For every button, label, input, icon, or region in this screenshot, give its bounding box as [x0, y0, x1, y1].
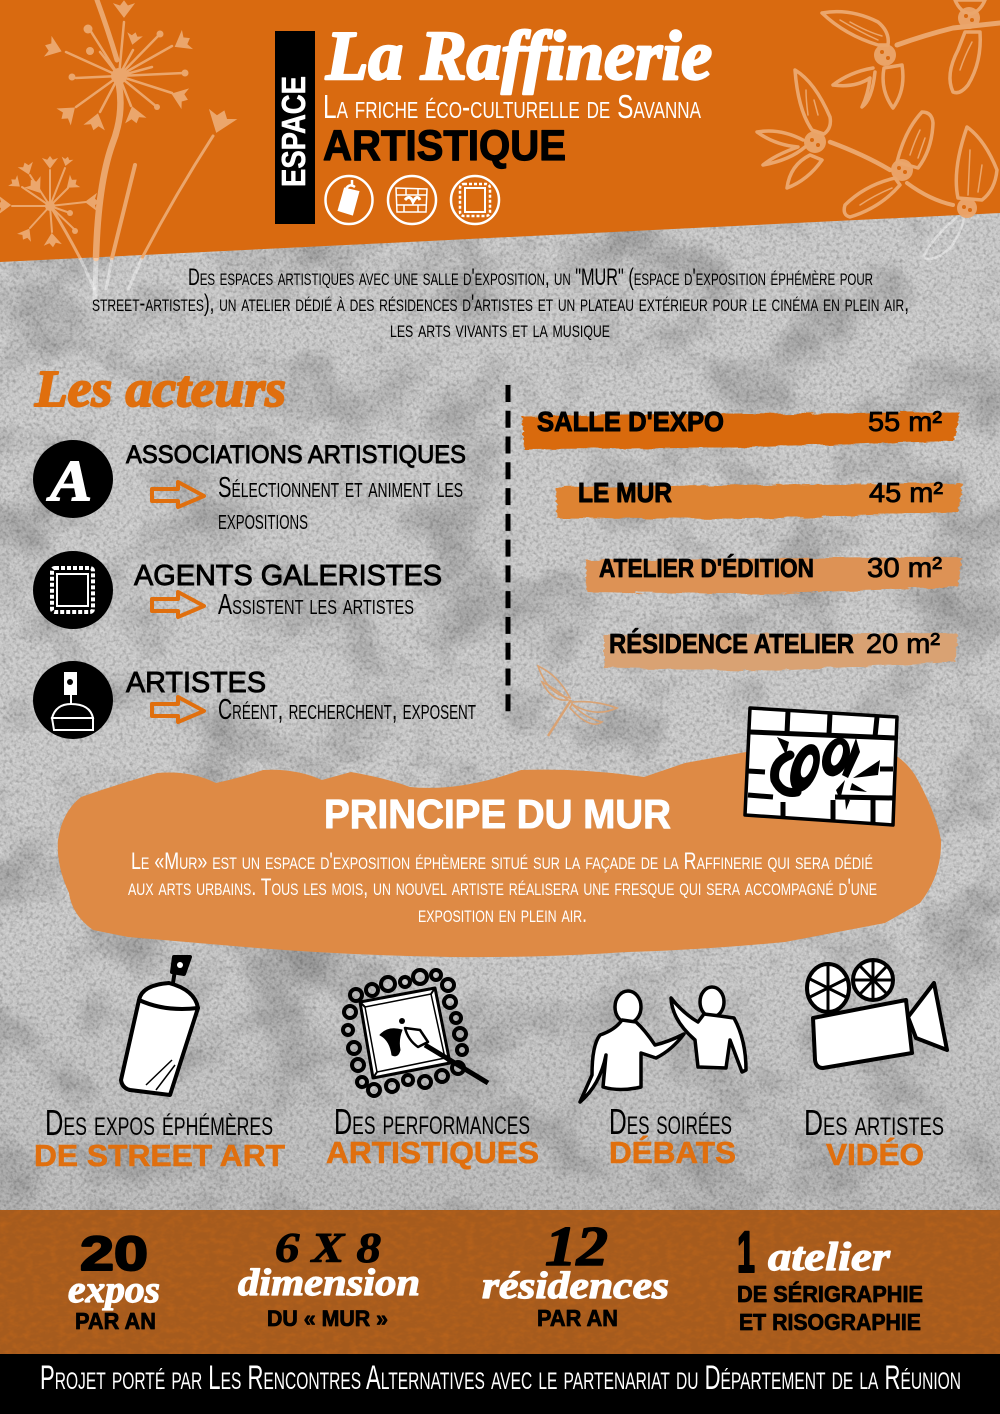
- vertical label: ESPACE: ESPACE: [275, 76, 312, 187]
- icon: wall: [388, 176, 436, 224]
- icon: two people talking: [580, 987, 746, 1102]
- label: video: VIDÉO: [826, 1137, 924, 1172]
- bar: résidence atelier: 20 m²: [866, 628, 940, 659]
- illustration: blossoms right: [757, 0, 1000, 218]
- subtitle: La friche éco-culturelle de Savanna: [323, 88, 701, 125]
- label: performances: [326, 1101, 539, 1170]
- label: street art: [34, 1102, 285, 1173]
- bar: atelier d'édition: [586, 552, 962, 594]
- title: La Raffinerie: [325, 18, 712, 95]
- bar: le mur: [556, 477, 963, 519]
- icon: frame badge: [33, 551, 113, 629]
- actor: agents galeristes: AGENTS GALERISTES: [134, 560, 442, 592]
- label: video: Des artistes: [804, 1102, 944, 1143]
- actor: agents galeristes: [134, 560, 442, 621]
- label: performances: Des performances: [334, 1101, 530, 1142]
- stat: 1 atelier: atelier: [768, 1234, 890, 1279]
- stat: 1 atelier: ET RISOGRAPHIE: [739, 1309, 921, 1335]
- footer: [0, 1354, 1000, 1414]
- bar: le mur: 45 m²: [869, 477, 943, 508]
- body text: exposition en plein air.: [418, 901, 587, 928]
- actor: agents galeristes: Assistent les artistes: [218, 589, 414, 621]
- icon: painted frame: [343, 970, 488, 1096]
- icon: letter A badge: A: [47, 448, 92, 513]
- actor: associations: expositions: [218, 504, 308, 536]
- stat: 12 residences: PAR AN: [537, 1305, 618, 1331]
- heading: les acteurs: Les acteurs: [34, 361, 286, 418]
- actor: artistes: [126, 667, 476, 726]
- intro text: les arts vivants et la musique: [390, 316, 610, 343]
- actor: artistes: ARTISTES: [126, 667, 266, 699]
- label: street art: Des expos éphémères: [45, 1102, 273, 1143]
- header icons: [326, 176, 499, 224]
- actor: associations: [126, 441, 466, 536]
- stat: 1 atelier: [737, 1220, 923, 1335]
- actor: associations: ASSOCIATIONS ARTISTIQUES: [126, 441, 466, 469]
- header band: [0, 0, 1000, 262]
- arrow: [152, 592, 204, 617]
- bar: salle d'expo: [522, 406, 960, 449]
- stat: 6 x 8 dimension: dimension: [238, 1262, 420, 1304]
- stat: 20 expos: expos: [68, 1269, 160, 1311]
- stat: 20 expos: 20: [80, 1228, 148, 1281]
- icon: spray badge: [33, 661, 113, 739]
- illustration: dandelions left: [0, 0, 232, 258]
- heading: PRINCIPE DU MUR: [324, 791, 671, 837]
- panel: principe du mur: [58, 752, 941, 957]
- illustration: faded stems over concrete: [80, 217, 964, 300]
- heading: artistique: ARTISTIQUE: [323, 122, 566, 170]
- icon: frame: [451, 176, 499, 224]
- bar: salle d'expo: 55 m²: [868, 406, 942, 437]
- bar: salle d'expo: SALLE D'EXPO: [537, 406, 724, 437]
- intro text: [92, 264, 909, 343]
- icon: film camera: [807, 960, 947, 1068]
- label: performances: ARTISTIQUES: [326, 1135, 539, 1170]
- body text: [128, 848, 877, 928]
- icon: spray can large: [121, 957, 198, 1095]
- icon: letter A badge: [33, 440, 113, 518]
- arrow: [152, 697, 204, 722]
- label: debats: DÉBATS: [609, 1135, 736, 1170]
- stat: 6 x 8 dimension: [238, 1226, 420, 1331]
- bar: atelier d'édition: 30 m²: [867, 552, 942, 583]
- stat: 20 expos: [68, 1228, 160, 1334]
- stat: 1 atelier: DE SÉRIGRAPHIE: [737, 1280, 923, 1307]
- stat: 12 residences: [482, 1216, 669, 1331]
- stat: 12 residences: 12: [545, 1216, 608, 1278]
- stat: 20 expos: PAR AN: [75, 1308, 156, 1334]
- stats band: [0, 1210, 1000, 1354]
- label: video: [804, 1102, 944, 1172]
- arrow: [152, 482, 204, 507]
- actor: associations: Sélectionnent et animent les: [218, 472, 463, 504]
- actor: artistes: Créent, recherchent, exposent: [218, 694, 476, 726]
- bar: atelier d'édition: ATELIER D'ÉDITION: [599, 553, 814, 583]
- vertical label: ESPACE: [275, 31, 315, 224]
- bar: le mur: LE MUR: [578, 477, 672, 508]
- stat: 6 x 8 dimension: DU « MUR »: [267, 1306, 388, 1331]
- label: street art: DE STREET ART: [34, 1138, 285, 1173]
- bar: résidence atelier: RÉSIDENCE ATELIER: [609, 628, 854, 659]
- stat: 1 atelier: 1: [737, 1220, 755, 1285]
- icon: spray can: [326, 176, 372, 224]
- stat: 12 residences: résidences: [482, 1265, 669, 1307]
- stat: 6 x 8 dimension: 6 X 8: [275, 1226, 381, 1272]
- label: debats: Des soirées: [609, 1101, 732, 1142]
- label: debats: [609, 1101, 736, 1170]
- bar: résidence atelier: [604, 628, 958, 671]
- icon: graffiti wall: [745, 708, 897, 825]
- illustration: dragonfly: [538, 666, 617, 736]
